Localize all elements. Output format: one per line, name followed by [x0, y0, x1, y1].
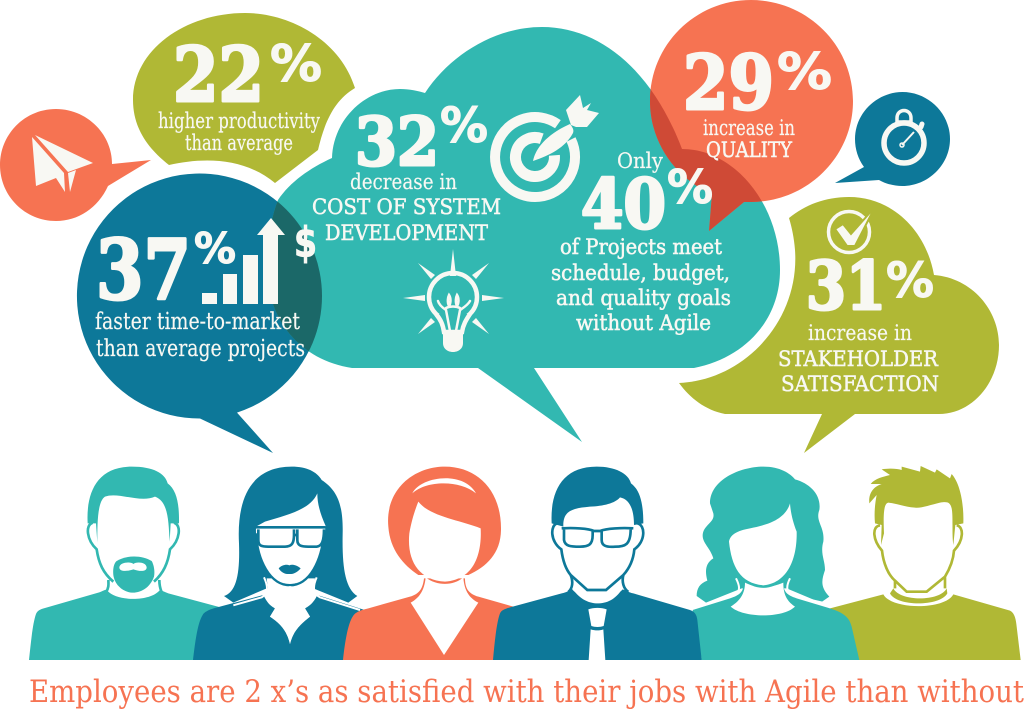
- text: cost of system development: decrease in: [350, 170, 457, 194]
- icon: stopwatch: [884, 110, 924, 163]
- text: increase in stakeholder satisfaction: [778, 321, 939, 396]
- stat: 37%: 37: [96, 223, 191, 319]
- stat: 40%: %: [667, 160, 713, 214]
- stat: 29%: 29: [683, 39, 774, 127]
- text: increase in quality: QUALITY: [706, 138, 793, 162]
- person: woman with headband: [343, 467, 517, 660]
- stat: 32%: [355, 98, 488, 181]
- icon: check mark: [828, 207, 875, 252]
- person: bearded man: [29, 467, 227, 660]
- text: cost of system development: [312, 170, 501, 245]
- stat: 32%: %: [440, 98, 488, 154]
- text: increase in stakeholder satisfaction: increase in: [808, 321, 912, 345]
- text: faster time-to-market: faster time-to-market: [95, 309, 301, 335]
- overlap: blue and teal: [272, 202, 322, 352]
- text: higher productivity: higher productivity: [158, 109, 320, 133]
- bubble: 37% faster time-to-market: [77, 174, 322, 453]
- text: faster time-to-market: [95, 309, 305, 362]
- bubble: 22% higher productivity: [133, 13, 355, 183]
- stat: 40%: [581, 160, 713, 245]
- icon: paper plane: [32, 135, 93, 192]
- stat: 40%: 40: [581, 165, 666, 245]
- icon: lightbulb: [403, 249, 504, 352]
- bubble: teal cloud: [267, 27, 780, 442]
- person: curly-haired woman: [693, 467, 859, 660]
- text: cost of system development: COST OF SYSTEM: [312, 195, 501, 219]
- text: increase in quality: [703, 116, 795, 162]
- text: only: Only: [617, 149, 663, 173]
- text: cost of system development: DEVELOPMENT: [325, 221, 488, 245]
- person: man with glasses and tie: [493, 467, 702, 660]
- person: woman with glasses: [193, 467, 367, 660]
- text: increase in quality: increase in: [703, 116, 795, 140]
- text: higher productivity: [158, 109, 320, 155]
- text: increase in stakeholder satisfaction: SATISFACTION: [781, 372, 939, 396]
- text: projects meet goals: without Agile: [576, 311, 711, 335]
- bubble: stopwatch: [835, 92, 950, 186]
- bubble: 29% quality: [650, 0, 853, 231]
- stat: 31%: %: [886, 253, 934, 309]
- overlap: orange and teal: [650, 90, 762, 231]
- text: projects meet goals: of Projects meet: [560, 235, 723, 259]
- stat: 37%: %: [194, 224, 236, 273]
- text: increase in stakeholder satisfaction: STAKEHOLDER: [778, 347, 939, 371]
- stat: 22%: 22: [173, 31, 264, 119]
- icon: rising bars with arrow: [202, 218, 285, 304]
- icon: target with dart: [495, 95, 599, 197]
- stat: 31%: 31: [806, 247, 886, 325]
- text: faster time-to-market: than average projects: [96, 336, 305, 362]
- text: projects meet goals: schedule, budget,: [551, 261, 730, 285]
- person: green spiky-haired man: [830, 466, 1021, 660]
- text: higher productivity: than average: [185, 131, 293, 155]
- text: projects meet goals: [551, 235, 731, 335]
- bubble: paper plane: [0, 109, 151, 221]
- stat: 29%: %: [777, 43, 832, 101]
- bubble: 31% stakeholder: [679, 197, 999, 453]
- text: projects meet goals: and quality goals: [556, 286, 731, 310]
- stat: 22%: %: [270, 35, 322, 93]
- stat: 32%: 32: [355, 103, 439, 181]
- icon: dollar: $: [294, 218, 317, 267]
